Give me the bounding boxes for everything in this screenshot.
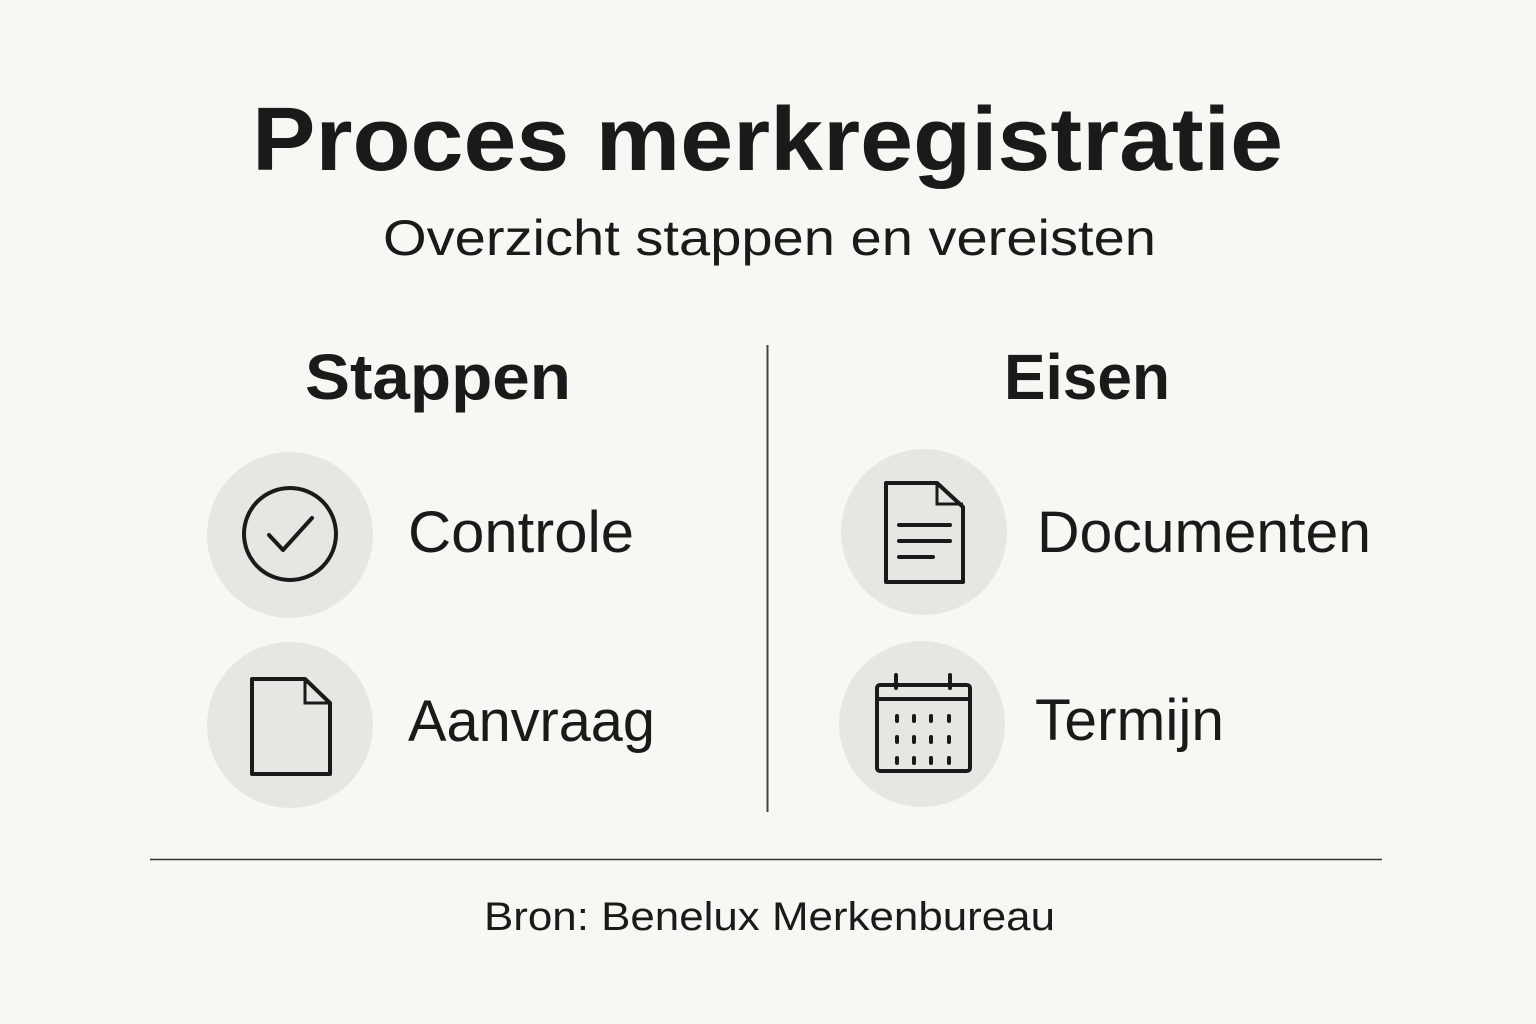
label: Aanvraag: Aanvraag — [408, 689, 655, 754]
subtitle: Overzicht stappen en vereisten — [383, 210, 1156, 266]
item: Termijn — [839, 641, 1224, 807]
icon: document with lines — [841, 449, 1007, 615]
icon: check circle — [207, 452, 373, 618]
source footer: Bron: Benelux Merkenbureau — [484, 895, 1055, 939]
item: Documenten — [841, 449, 1371, 615]
heading: Stappen: Stappen — [305, 341, 571, 413]
icon: blank document — [207, 642, 373, 808]
heading: Eisen: Eisen — [1004, 341, 1170, 413]
icon: calendar — [839, 641, 1005, 807]
title: Proces merkregistratie — [252, 90, 1283, 190]
item: Aanvraag — [207, 642, 655, 808]
label: Documenten: Documenten — [1037, 500, 1371, 565]
item: Controle — [207, 452, 634, 618]
label: Controle: Controle — [408, 500, 634, 565]
label: Termijn: Termijn — [1035, 688, 1224, 753]
